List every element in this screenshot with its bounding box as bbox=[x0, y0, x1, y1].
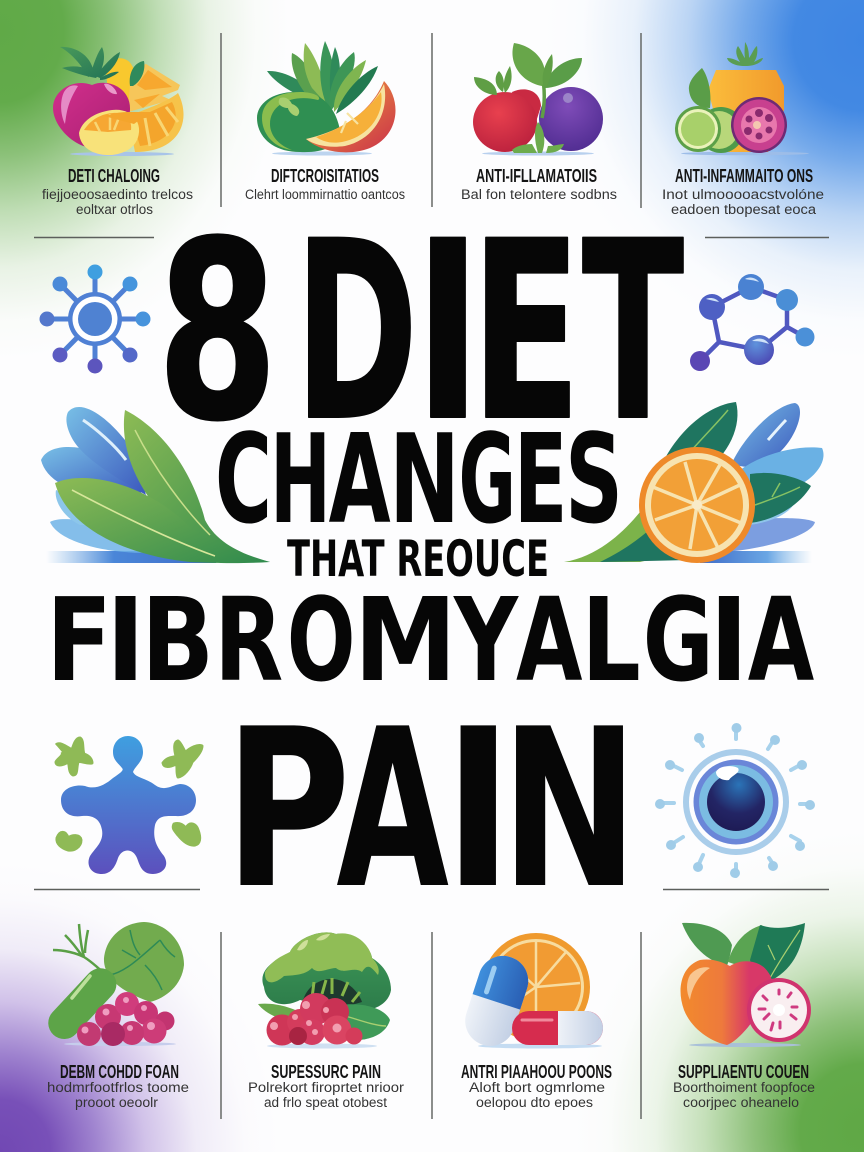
icon: pineapple, lime and dragon fruit bbox=[675, 42, 809, 155]
title line: FIBROMYALGIA: I bbox=[709, 574, 749, 708]
title line: CHANGES: N bbox=[389, 409, 460, 552]
icon: blue blob figure bbox=[56, 736, 202, 874]
heading: ANTI-IFLLAMATOIIS bbox=[476, 166, 597, 186]
title line: FIBROMYALGIA: I bbox=[106, 574, 145, 708]
icon: peach and fruit slice bbox=[681, 923, 811, 1047]
icon: virus network bbox=[40, 264, 150, 374]
icon: green fruit and citrus wedge bbox=[257, 41, 396, 156]
title line: PAIN: P bbox=[225, 682, 351, 937]
text block: Inot ulmooooacstvolóne bbox=[662, 187, 824, 202]
panel: bottom item 2 bbox=[248, 932, 405, 1110]
title line: 8 DIET: 8 bbox=[157, 190, 278, 476]
title line: THAT REDUCE: THAT REOUCE bbox=[287, 530, 549, 588]
heading: SUPESSURC PAIN bbox=[271, 1062, 381, 1082]
title line: 8 DIET: T bbox=[582, 190, 684, 476]
panel: bottom item 3 bbox=[459, 933, 612, 1110]
title line: FIBROMYALGIA: R bbox=[214, 574, 283, 708]
title line: FIBROMYALGIA: M bbox=[354, 574, 457, 708]
heading: DEBM COHDD FOAN bbox=[60, 1062, 179, 1082]
title line: CHANGES: E bbox=[514, 409, 568, 552]
text block: hodmrfootfrlos toome bbox=[47, 1080, 189, 1095]
text block: Polrekort firoprtet nrioor bbox=[248, 1080, 405, 1095]
title line: PAIN: I bbox=[443, 682, 513, 937]
title line: FIBROMYALGIA: G bbox=[643, 574, 714, 708]
text block: eadoen tbopesat eoca bbox=[671, 202, 817, 217]
icon: eye bbox=[655, 723, 815, 878]
text block: Clehrt loommirnattio oantcos bbox=[245, 187, 405, 202]
icon: leaf, capsule and berries bbox=[42, 922, 184, 1046]
text block: Bal fon telontere sodbns bbox=[461, 187, 617, 202]
heading: DETI CHALOING bbox=[68, 166, 160, 186]
title line: FIBROMYALGIA: F bbox=[46, 574, 112, 708]
title line: 8 DIET: D bbox=[295, 190, 418, 476]
title line: PAIN: A bbox=[336, 682, 449, 937]
icon: left leaves bbox=[41, 407, 270, 563]
title line: CHANGES: C bbox=[215, 409, 272, 552]
text block: fiejjoeoosaedinto trelcos bbox=[42, 187, 193, 202]
panel: bottom item 4 bbox=[673, 923, 815, 1110]
title line: FIBROMYALGIA: B bbox=[141, 574, 214, 708]
icon: right leaves and orange bbox=[564, 402, 824, 563]
panel: bottom item 1 bbox=[42, 922, 189, 1110]
text block: Aloft bort ogmrlome bbox=[469, 1080, 605, 1095]
title line: 8 DIET: I bbox=[414, 190, 482, 476]
title line: CHANGES: S bbox=[565, 409, 623, 552]
main title bbox=[46, 190, 814, 937]
title line: FIBROMYALGIA: Y bbox=[452, 574, 519, 708]
icon: molecule bbox=[690, 274, 814, 371]
panel: top item 4 bbox=[662, 42, 824, 217]
title line: FIBROMYALGIA: O bbox=[287, 574, 356, 708]
title line: 8 DIET: E bbox=[471, 190, 581, 476]
text block: ad frlo speat otobest bbox=[264, 1095, 387, 1110]
text block: coorjpec oheanelo bbox=[683, 1095, 799, 1110]
text block: eoltxar otrlos bbox=[76, 202, 153, 217]
title line: FIBROMYALGIA: L bbox=[581, 574, 641, 708]
text block: prooot oeoolr bbox=[75, 1095, 159, 1110]
icon: broccoli and berries bbox=[258, 932, 391, 1048]
title line: FIBROMYALGIA: A bbox=[748, 574, 814, 708]
title line: CHANGES: G bbox=[458, 409, 516, 552]
text block: Boorthoiment foopfoce bbox=[673, 1080, 815, 1095]
title line: PAIN: N bbox=[501, 682, 638, 937]
panel: top item 1 bbox=[42, 47, 193, 217]
text block: oelopou dto epoes bbox=[476, 1095, 593, 1110]
icon: apple and citrus bbox=[53, 47, 184, 156]
panel: top item 2 bbox=[245, 41, 405, 202]
heading: DIFTCROISITATIOS bbox=[271, 166, 379, 186]
panel: top item 3 bbox=[461, 43, 617, 202]
icon: capsules and orange bbox=[459, 933, 603, 1052]
title line: CHANGES: H bbox=[270, 409, 331, 552]
heading: ANTRI PIAAHOOU POONS bbox=[461, 1062, 612, 1082]
title line: CHANGES: A bbox=[329, 409, 391, 552]
title line: FIBROMYALGIA: A bbox=[516, 574, 582, 708]
icon: apple and plum bbox=[473, 43, 603, 156]
